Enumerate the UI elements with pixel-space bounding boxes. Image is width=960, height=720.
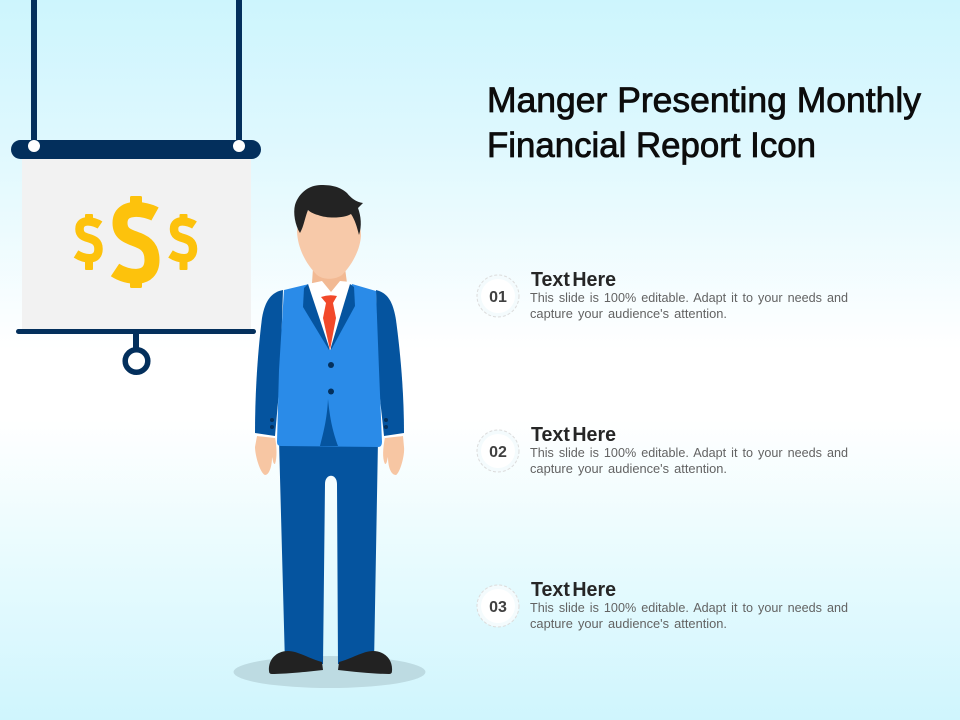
hanging straps (31, 0, 242, 146)
heading 01: Text Here (531, 269, 616, 291)
top roller (11, 140, 261, 159)
hair (294, 185, 363, 235)
body 01: This slide is 100% editable. Adapt it to your needs and (530, 291, 848, 305)
icon: right dollar (170, 214, 194, 270)
body 02 (530, 446, 848, 476)
heading 03: Text Here (531, 579, 616, 601)
icon: left dollar (76, 214, 100, 270)
body 03: This slide is 100% editable. Adapt it to your needs and (530, 601, 848, 615)
body 01 (530, 291, 848, 321)
number badge 03 (477, 585, 519, 627)
trousers (279, 440, 378, 664)
number badge 02: 02 (489, 444, 507, 461)
presentation screen (11, 0, 261, 372)
item 02 (477, 424, 848, 476)
title: Financial Report Icon (487, 126, 816, 165)
body 01: capture your audience's attention. (530, 307, 727, 321)
jacket vent (320, 399, 338, 446)
body 03: capture your audience's attention. (530, 617, 727, 631)
item 03 (477, 579, 848, 631)
shirt collar (308, 281, 351, 350)
sleeve buttons (270, 418, 388, 429)
pull cord and ring (125, 333, 148, 372)
icon: center dollar (115, 196, 155, 288)
number badge 03: 03 (489, 599, 507, 616)
shoes (269, 651, 392, 674)
red tie (321, 295, 337, 350)
ground shadow (234, 656, 426, 688)
body 02: This slide is 100% editable. Adapt it to your needs and (530, 446, 848, 460)
roller eyelets (28, 140, 245, 152)
shirt cuffs (257, 433, 403, 438)
businessman figure (234, 185, 426, 688)
bottom bar (16, 329, 256, 334)
title (487, 81, 922, 165)
jacket buttons (328, 362, 334, 394)
title: Manger Presenting Monthly (487, 81, 922, 120)
projection sheet (22, 158, 251, 330)
body 02: capture your audience's attention. (530, 462, 727, 476)
number badge 01: 01 (489, 289, 507, 306)
body 03 (530, 601, 848, 631)
number badge 02 (477, 430, 519, 472)
heading 02: Text Here (531, 424, 616, 446)
lapels (303, 284, 355, 350)
item 01 (477, 269, 848, 321)
face (297, 205, 361, 279)
number badge 01 (477, 275, 519, 317)
vest jacket (277, 284, 382, 447)
icon: dollar signs (76, 196, 194, 288)
neck (312, 268, 347, 302)
hands (255, 436, 404, 475)
sleeves (255, 290, 404, 436)
